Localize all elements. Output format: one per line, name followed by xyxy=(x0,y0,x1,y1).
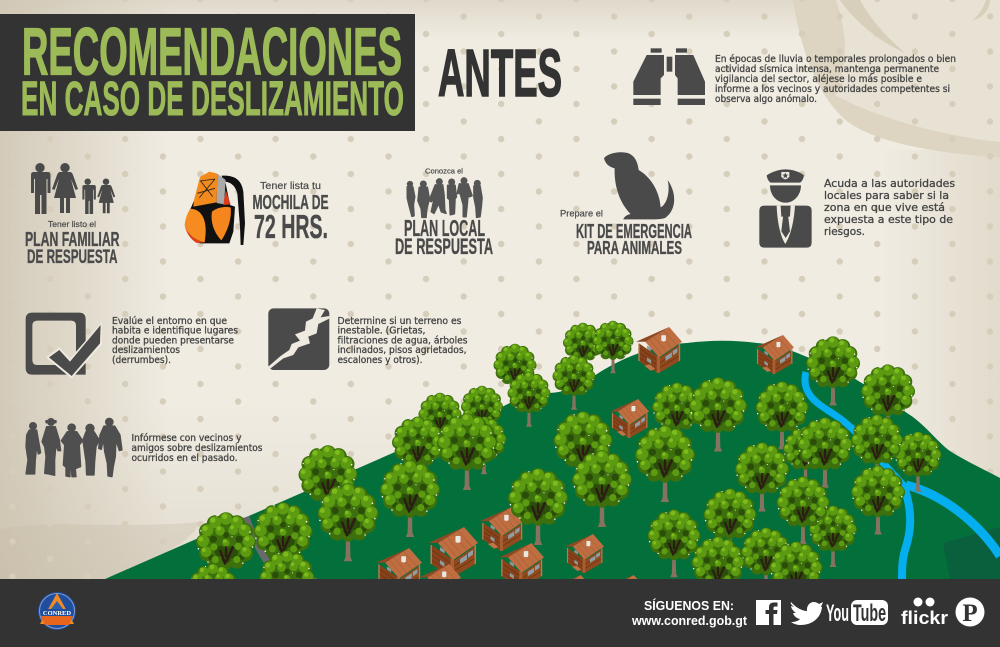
text: en épocas de lluvia xyxy=(715,54,956,105)
river xyxy=(805,372,1000,580)
text: en épocas de lluvia: vigilancia del sector, aléjese lo más posible e xyxy=(715,74,922,85)
label: mochila: 72 HRS. xyxy=(254,208,328,245)
text: determine si un terreno: filtraciones de agua, árboles xyxy=(338,336,468,346)
icon: checkbox xyxy=(26,313,102,379)
text: evalúe el entorno: habita e identifique lugares xyxy=(112,326,238,336)
text: acuda a las autoridades: riesgos. xyxy=(824,225,865,238)
icon: group of six people xyxy=(407,178,482,217)
text: infórmese con vecinos: Infórmese con vecinos y xyxy=(132,433,242,444)
label: plan familiar: DE RESPUESTA xyxy=(27,247,118,268)
text: acuda a las autoridades: zona en que vive está xyxy=(824,201,945,214)
title line 1: RECOMENDACIONES xyxy=(22,14,402,90)
icon: flickr xyxy=(901,598,948,628)
road xyxy=(246,517,316,582)
hillside xyxy=(105,341,1000,579)
trees xyxy=(188,321,942,628)
icon: backpack xyxy=(185,172,245,245)
text: en épocas de lluvia: observa algo anómalo. xyxy=(715,94,817,105)
text: acuda a las autoridades: expuesta a este tipo de xyxy=(824,213,953,226)
title banner xyxy=(0,14,415,131)
logo: conred xyxy=(38,592,76,630)
text: acuda a las autoridades xyxy=(824,177,955,238)
text: determine si un terreno: escalones y otros). xyxy=(338,355,422,366)
title line 2: EN CASO DE DESLIZAMIENTO xyxy=(21,73,404,126)
label: mochila: Tener lista tu xyxy=(260,180,321,192)
text: acuda a las autoridades: Acuda a las autoridades xyxy=(824,177,955,190)
label: plan familiar xyxy=(25,219,120,268)
text: infórmese con vecinos xyxy=(132,433,263,464)
text: en épocas de lluvia: En épocas de lluvia o temporales prolongados o bien xyxy=(715,54,956,65)
icon: flickr: flickr xyxy=(901,608,948,628)
icon: twitter xyxy=(791,602,823,625)
text: acuda a las autoridades: locales para saber si la xyxy=(824,189,949,202)
text: infórmese con vecinos: amigos sobre deslizamientos xyxy=(132,443,263,454)
text: determine si un terreno: inestable. (Grietas, xyxy=(338,326,426,336)
label: plan familiar: PLAN FAMILIAR xyxy=(25,229,120,251)
text: determine si un terreno: Determine si un terreno es xyxy=(338,316,462,327)
icon: youtube: Tube xyxy=(853,600,886,627)
icon: cracked ground xyxy=(268,308,329,370)
logo: conred: CONRED xyxy=(43,610,71,617)
text: evalúe el entorno: donde pueden presentarse xyxy=(112,336,234,346)
label: plan local xyxy=(395,215,493,259)
label: mochila: MOCHILA DE xyxy=(252,192,328,214)
footer text: síguenos: SÍGUENOS EN: xyxy=(644,598,734,613)
label: kit de emergencia: PARA ANIMALES xyxy=(587,238,682,258)
label: mochila xyxy=(252,180,328,245)
dark patch on hill xyxy=(943,527,1000,579)
text: en épocas de lluvia: informe a los vecinos y autoridades competentes si xyxy=(715,84,950,95)
houses xyxy=(376,327,794,615)
text: evalúe el entorno xyxy=(112,316,238,366)
text: infórmese con vecinos: ocurridos en el pasado. xyxy=(132,453,238,464)
text: evalúe el entorno: deslizamientos xyxy=(112,345,180,356)
label: kit de emergencia xyxy=(560,208,692,258)
icon: pinterest xyxy=(956,598,984,627)
icon: group of neighbours xyxy=(26,418,122,477)
label: plan familiar: Tener listo el xyxy=(48,219,96,229)
footer bar xyxy=(0,579,1000,647)
heading: antes: ANTES xyxy=(438,36,562,111)
text: determine si un terreno: inclinados, pisos agrietados, xyxy=(338,345,466,356)
icon: pinterest: P xyxy=(962,600,978,627)
label: kit de emergencia: Prepare el xyxy=(560,208,603,220)
text: evalúe el entorno: (derrumbes). xyxy=(112,355,171,366)
label: conozca el: Conozca el xyxy=(425,166,463,176)
label: plan local: PLAN LOCAL xyxy=(404,215,485,241)
icon: binoculars xyxy=(633,48,705,105)
label: plan local: DE RESPUESTA xyxy=(395,234,493,259)
text: evalúe el entorno: Evalúe el entorno en que xyxy=(112,316,227,327)
icon: family xyxy=(31,163,115,214)
footer text: síguenos: www.conred.gob.gt xyxy=(631,613,748,628)
icon: dog xyxy=(604,152,674,219)
text: determine si un terreno xyxy=(338,316,468,366)
footer text: síguenos xyxy=(631,598,748,628)
text: en épocas de lluvia: actividad sísmica intensa, mantenga permanente xyxy=(715,64,939,75)
icon: police officer xyxy=(759,169,812,248)
label: kit de emergencia: KIT DE EMERGENCIA xyxy=(576,221,692,243)
icon: facebook xyxy=(756,600,781,625)
icon: youtube: You xyxy=(826,600,849,627)
